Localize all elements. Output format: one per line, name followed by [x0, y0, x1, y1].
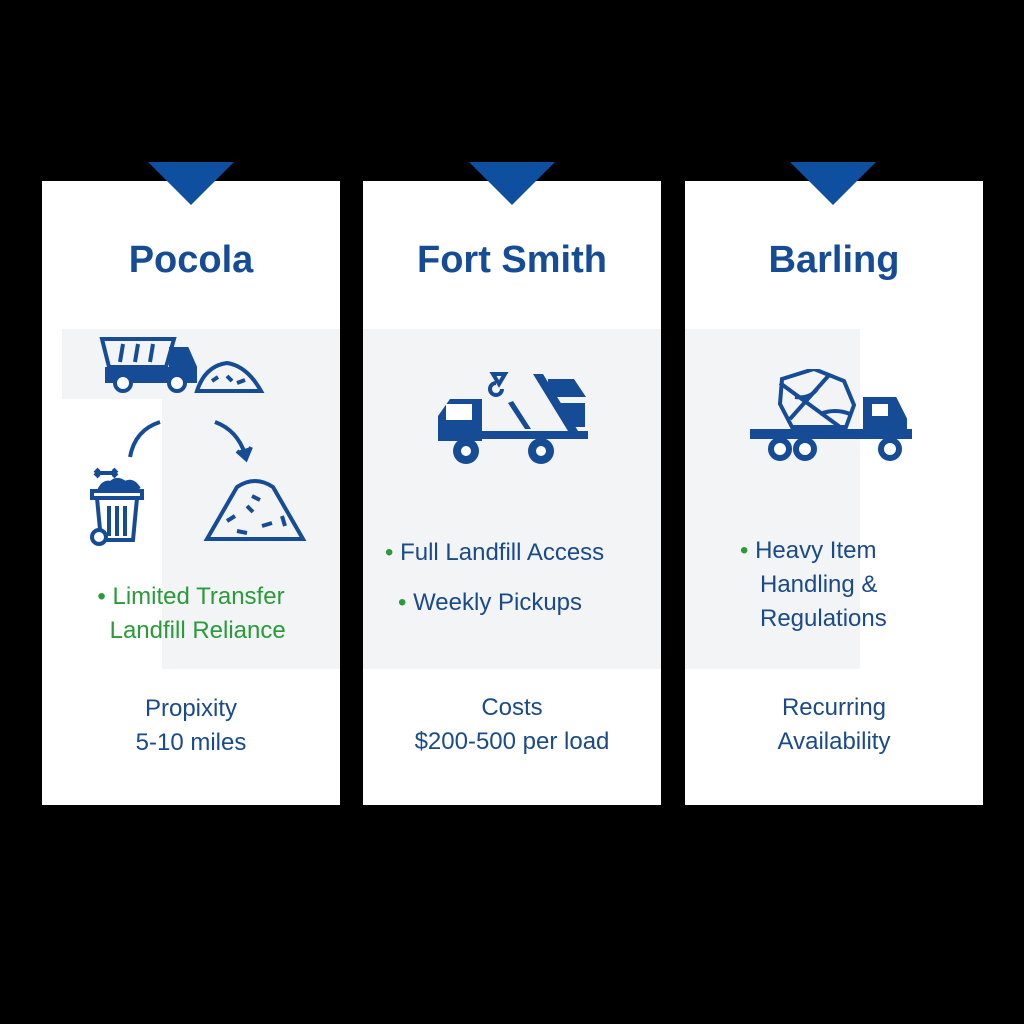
icon: skip truck — [438, 372, 588, 464]
bullet text — [740, 537, 887, 632]
arrow marker Fort Smith — [469, 162, 555, 205]
panel: Fort Smith — [363, 181, 661, 805]
bullet text: • Heavy Item — [740, 537, 876, 564]
title: Fort Smith — [417, 239, 607, 281]
arrow marker Barling — [790, 162, 876, 205]
costs text — [414, 694, 609, 755]
panel: Pocola — [42, 181, 340, 805]
availability text: Availability — [778, 728, 890, 755]
proximity text — [136, 695, 246, 756]
icons: dump truck, bin, pile — [90, 337, 306, 546]
icon: flatbed truck with rock — [750, 369, 912, 461]
costs text: Costs — [481, 694, 543, 721]
availability text: Recurring — [782, 694, 886, 721]
panel: Barling — [685, 181, 983, 805]
proximity text: Propixity — [145, 695, 237, 722]
title: Barling — [769, 239, 899, 281]
costs text: $200-500 per load — [415, 728, 609, 755]
proximity text: 5-10 miles — [136, 729, 246, 756]
bullet text: Landfill Reliance — [110, 617, 286, 644]
title: Pocola — [129, 239, 253, 281]
bullet text — [97, 583, 286, 644]
bullet text: Regulations — [760, 605, 887, 632]
bullet text: Handling & — [760, 571, 877, 598]
bullets: • Full Landfill Access — [385, 539, 604, 566]
bullet text: • Limited Transfer — [97, 583, 285, 610]
arrow marker Pocola — [148, 162, 234, 205]
availability text — [778, 694, 890, 755]
panel: Fort Smith: • Weekly Pickups — [398, 589, 582, 616]
